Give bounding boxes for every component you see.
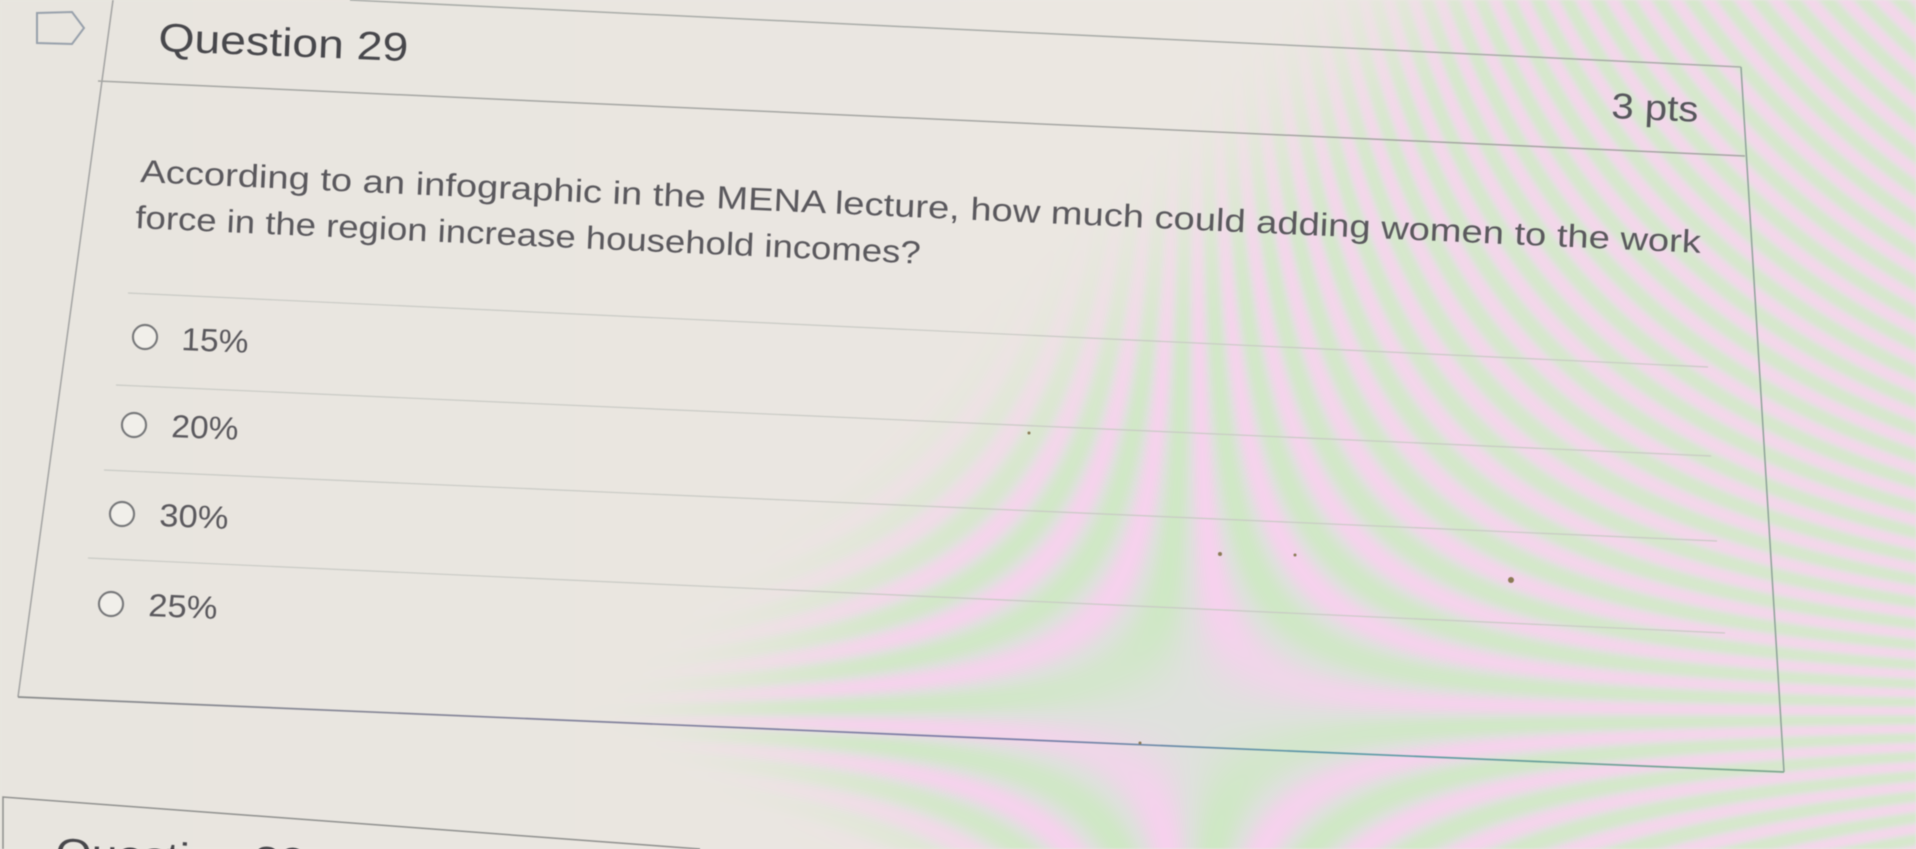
question text: According to an infographic in the MENA lecture, how much could adding women to the work [140, 153, 1703, 260]
answer option: 20%: 20% [171, 408, 239, 447]
answer option: 15%: 15% [181, 321, 249, 360]
answer option: 15% [133, 321, 249, 360]
icon: question flag [37, 12, 84, 44]
next question card, cut off [3, 797, 700, 849]
heading: Question 29: Question 29 [158, 16, 409, 70]
answer option: 30% [110, 497, 229, 536]
screen specks [1028, 432, 1514, 744]
answer option: 20% [122, 408, 239, 447]
points label: 3 pts [1611, 85, 1699, 130]
answer dividers [88, 293, 1725, 633]
question text [135, 153, 1703, 271]
answer option: 30%: 30% [159, 497, 229, 536]
answer option: 25% [99, 587, 218, 626]
question text: force in the region increase household incomes? [135, 199, 922, 271]
answer option: 25%: 25% [148, 587, 218, 626]
